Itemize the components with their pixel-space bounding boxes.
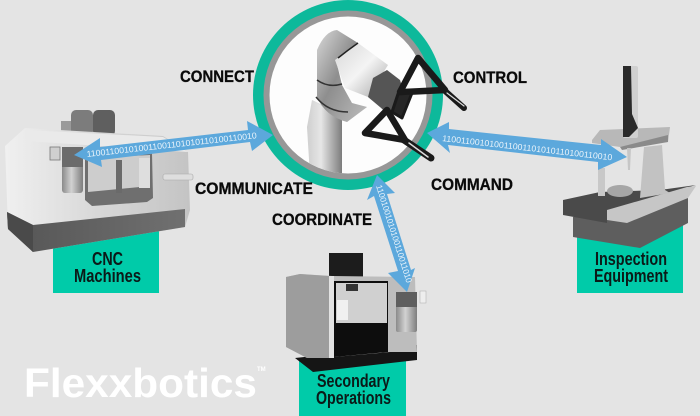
machine: secondary operations [286,253,426,372]
arrow: inspection to hub [427,122,627,170]
heading: CONNECT: CONNECT [180,67,255,86]
logo: Flexxbotics: TM [257,367,266,373]
robot: collar [320,104,321,106]
robot: elbow [317,30,367,122]
label: Inspection Equipment: Inspection [595,249,667,269]
heading: COORDINATE: COORDINATE [272,210,372,229]
arrow: secondary operations to hub: 11001001010100110011010 [374,184,414,284]
robot: gripper [365,58,464,158]
label: Inspection Equipment [577,225,683,293]
label: CNC Machines: Machines [74,266,141,286]
heading: COMMUNICATE: COMMUNICATE [195,179,313,198]
label: Inspection Equipment: Equipment [594,266,668,286]
label: Secondary Operations: Operations [316,388,391,408]
heading: CONTROL: CONTROL [453,68,527,87]
robot: forearm [335,43,388,97]
label: CNC Machines [53,225,159,293]
label: Secondary Operations [299,360,406,416]
machine: CNC [5,110,193,252]
arrow: CNC to hub: 110011001010011001101010110100110010 [86,130,257,159]
label: Secondary Operations: Secondary [317,371,390,391]
arrow: CNC to hub [74,121,273,167]
machine: inspection equipment [563,66,696,248]
logo: Flexxbotics: Flexxbotics [24,360,257,406]
label: CNC Machines: CNC [92,249,123,269]
robot: vertical arm [307,100,342,176]
heading: COMMAND: COMMAND [431,175,513,194]
robot: wrist [368,70,401,110]
arrow: inspection to hub: 110011001010011001101010110100110010 [442,133,613,162]
hub circle: robot arm [253,0,464,190]
